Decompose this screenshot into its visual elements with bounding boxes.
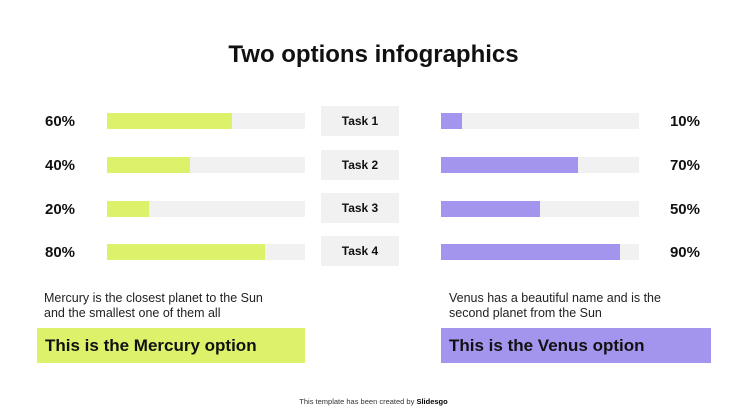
Venus description (449, 291, 661, 320)
right percentages: 50% (670, 201, 700, 218)
Mercury description: and the smallest one of them all (44, 306, 220, 320)
left percentages: 20% (45, 201, 75, 218)
task labels (321, 106, 399, 266)
Mercury option box (37, 328, 305, 363)
task labels: Task 2 (342, 158, 378, 172)
Venus option box (441, 328, 711, 363)
task labels: Task 4 (342, 244, 378, 258)
Venus description: second planet from the Sun (449, 306, 602, 320)
right percentages (670, 113, 700, 261)
task labels: Task 1 (342, 114, 378, 128)
Mercury description: Mercury is the closest planet to the Sun (44, 291, 263, 305)
left percentages: 60% (45, 113, 75, 130)
left percentages: 80% (45, 244, 75, 261)
right percentages: 10% (670, 113, 700, 130)
right percentages: 90% (670, 244, 700, 261)
title: Two options infographics (228, 41, 519, 68)
Venus description: Venus has a beautiful name and is the (449, 291, 661, 305)
left percentages (45, 113, 75, 261)
task labels: Task 3 (342, 201, 378, 215)
Mercury description (44, 291, 263, 320)
Venus option box: This is the Venus option (449, 336, 645, 355)
left bar chart (Mercury) (107, 113, 305, 260)
left percentages: 40% (45, 157, 75, 174)
right bar chart (Venus) (441, 113, 639, 260)
Mercury option box: This is the Mercury option (45, 336, 257, 355)
right percentages: 70% (670, 157, 700, 174)
footer credit: This template has been created by Slidesgo (299, 397, 448, 406)
